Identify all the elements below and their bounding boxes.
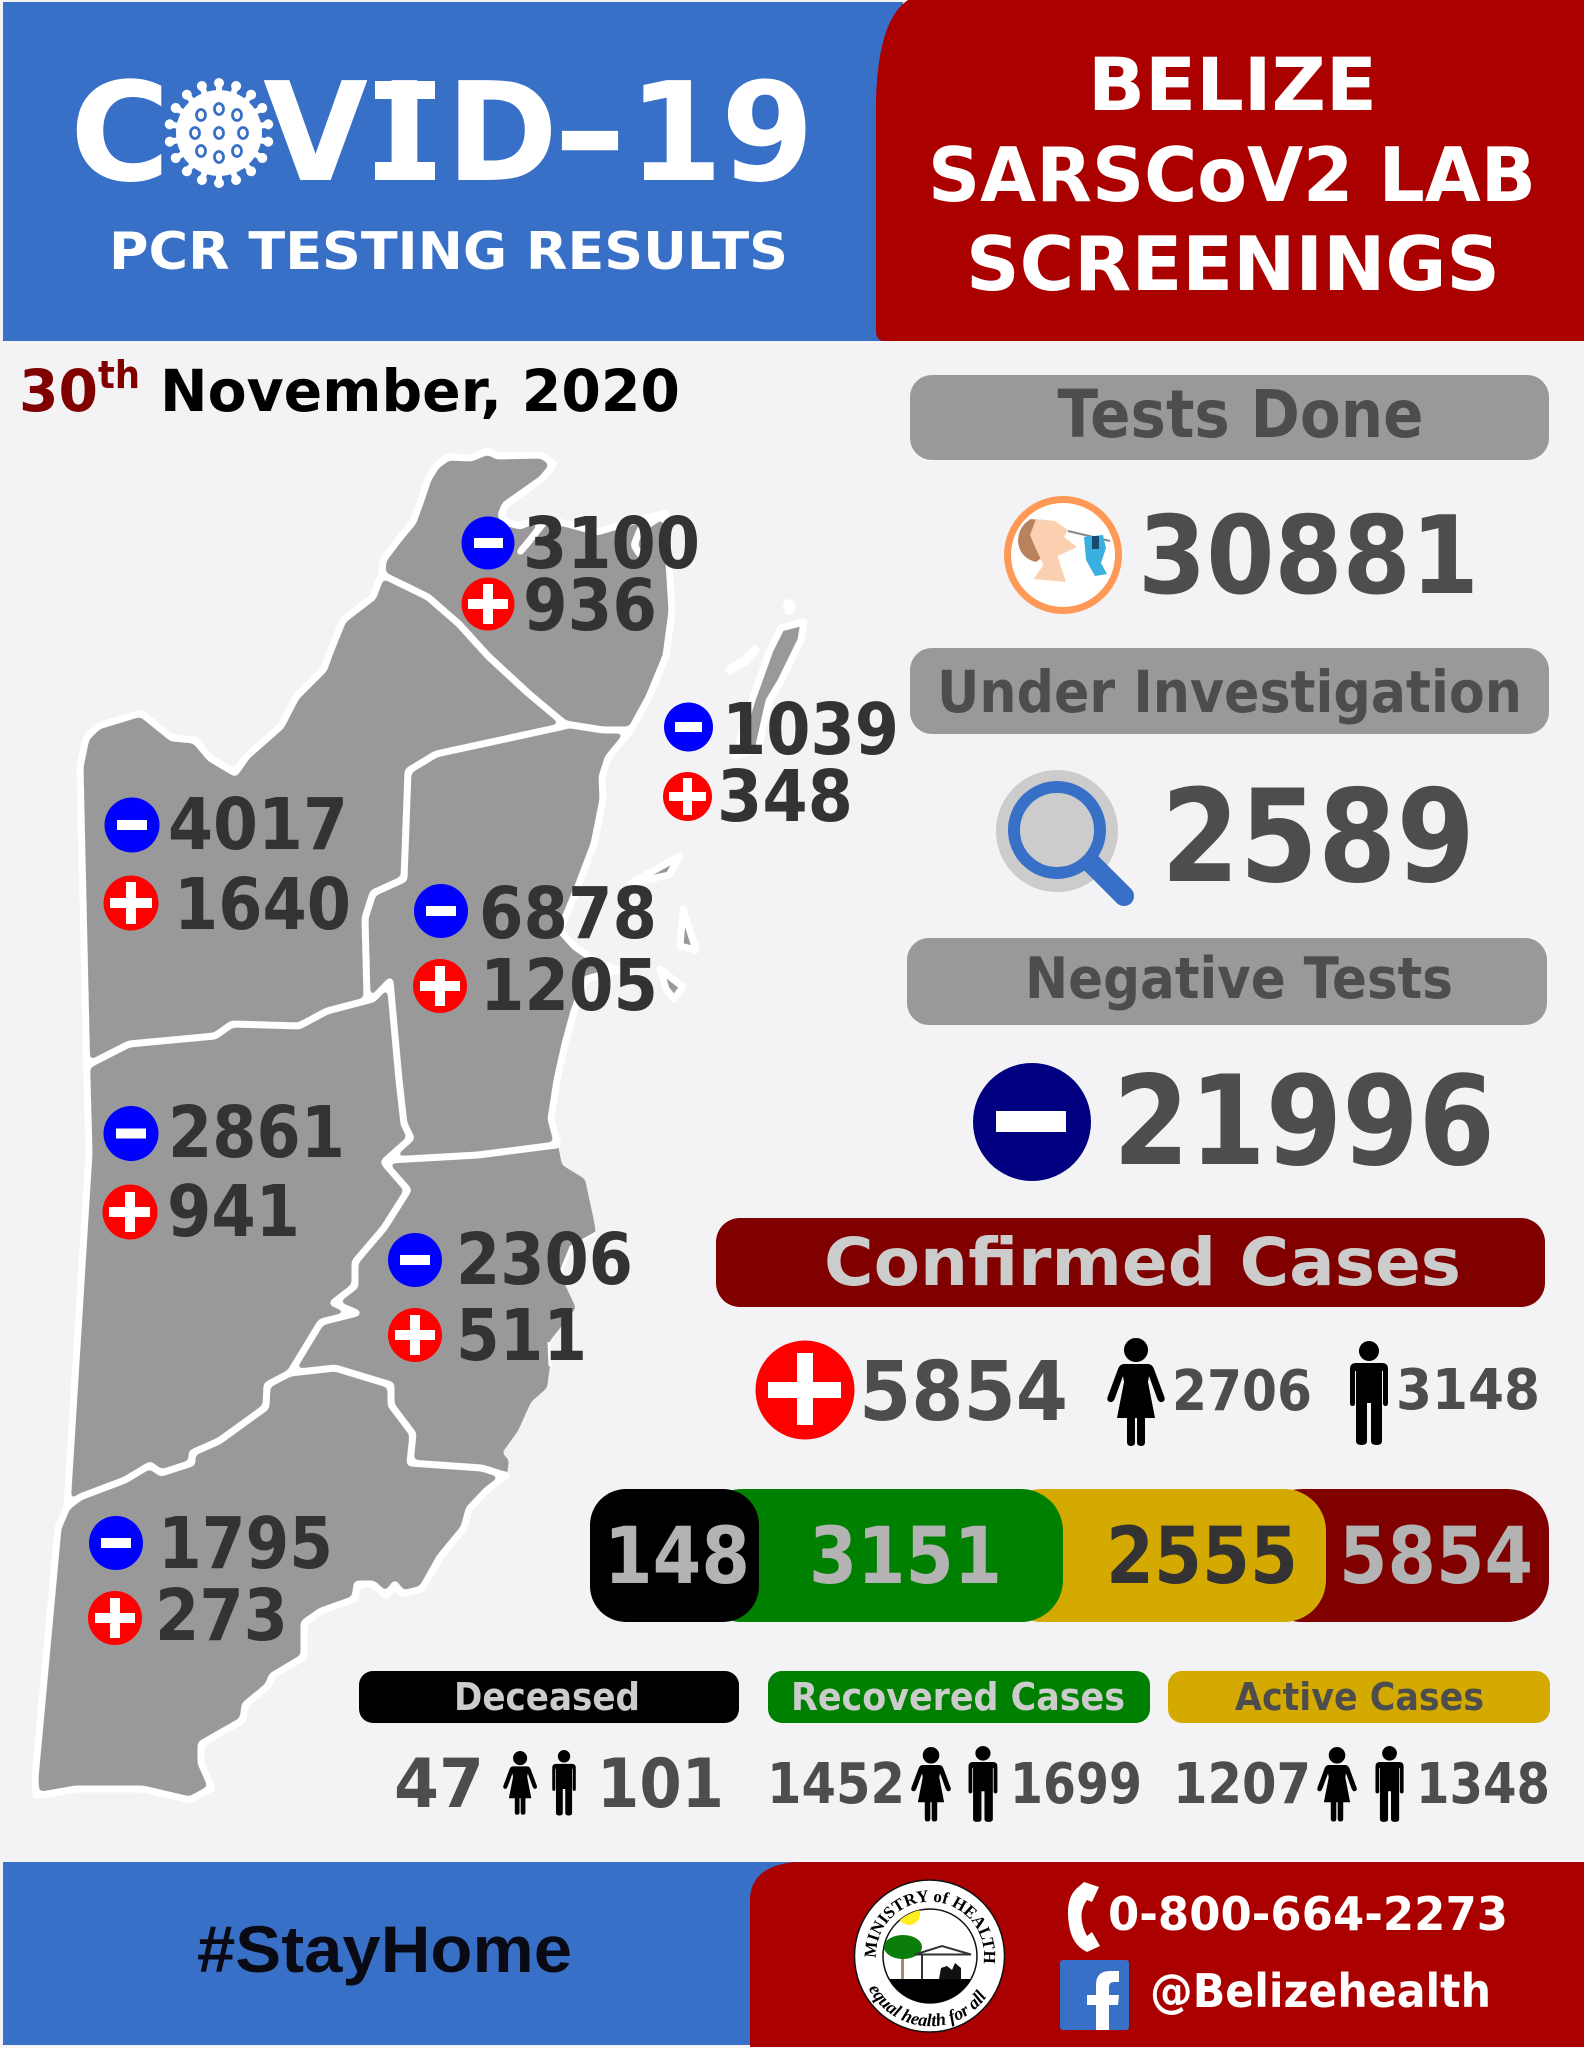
recovered by sex: 1699 <box>1010 1752 1142 1817</box>
panel: tests done <box>910 375 1549 460</box>
district: Orange Walk: 4017 <box>168 783 348 866</box>
title: COVID-19: 9 <box>721 54 814 213</box>
district: Cayo: 941 <box>167 1170 300 1253</box>
title: COVID-19: D <box>446 54 558 213</box>
district: Cayo: 2861 <box>168 1091 345 1174</box>
value: under investigation: 2589 <box>1161 763 1475 912</box>
district: Stann Creek: 2306 <box>456 1218 633 1301</box>
district: Toledo: 1795 <box>158 1502 333 1585</box>
deceased by sex: 47 <box>394 1745 484 1824</box>
heading lines <box>928 43 1536 308</box>
icon: male <box>1350 1341 1388 1445</box>
header: blue title panel <box>3 2 903 341</box>
district: Stann Creek: 511 <box>456 1294 587 1377</box>
active by sex <box>1173 1746 1550 1822</box>
legend: active cases: Active Cases <box>1235 1675 1484 1719</box>
stacked bar: case breakdown: 148 <box>604 1512 750 1602</box>
islands <box>631 622 804 999</box>
district: San Pedro: 348 <box>717 755 853 838</box>
panel: negative tests: Negative Tests <box>1025 946 1453 1012</box>
district: Belize: 1205 <box>480 944 658 1027</box>
logo: Ministry of Health seal <box>854 1879 1006 2033</box>
icon: minus circle <box>973 1063 1091 1181</box>
value: tests done: 30881 <box>1138 494 1479 619</box>
district: Stann Creek <box>388 1218 633 1377</box>
icon: female <box>1107 1338 1165 1446</box>
district: Cayo <box>102 1091 345 1253</box>
icon: magnifying glass <box>996 770 1124 896</box>
legend: deceased <box>359 1671 739 1723</box>
title: COVID-19 <box>70 54 814 213</box>
panel: tests done: Tests Done <box>1058 376 1424 453</box>
icon: telephone <box>1068 1882 1100 1952</box>
icon: Facebook <box>1060 1960 1129 2030</box>
panel: confirmed cases <box>716 1218 1545 1307</box>
deceased by sex: 101 <box>597 1745 724 1824</box>
value: confirmed male: 3148 <box>1396 1358 1540 1423</box>
thin coast marks <box>549 1233 596 1366</box>
district: Belize: 6878 <box>479 872 657 955</box>
district: Corozal: 936 <box>523 564 657 647</box>
value: confirmed female: 2706 <box>1172 1359 1312 1424</box>
title: COVID-19: 1 <box>628 54 723 213</box>
active by sex: 1348 <box>1416 1752 1550 1817</box>
footer: blue hashtag panel: #StayHome <box>197 1912 572 1986</box>
date: November, 2020 <box>160 357 680 425</box>
heading lines: SCREENINGS <box>966 220 1500 308</box>
district borders and coastline <box>35 451 672 1800</box>
footer: blue hashtag panel <box>3 1862 803 2045</box>
value: negative tests: 21996 <box>1113 1050 1495 1194</box>
icon: nasal swab test <box>1008 500 1118 610</box>
title: COVID-19: - <box>552 54 628 213</box>
district: San Pedro <box>663 688 899 838</box>
recovered by sex <box>767 1746 1142 1822</box>
district: San Pedro: 1039 <box>722 688 899 771</box>
stacked bar: case breakdown <box>590 1489 1549 1622</box>
date: 30 <box>19 357 98 425</box>
panel: under investigation: Under Investigation <box>937 658 1522 726</box>
value: confirmed cases: 5854 <box>859 1345 1068 1440</box>
panel: negative tests <box>907 938 1547 1025</box>
title: COVID-19: V <box>263 54 368 213</box>
district: Toledo: 273 <box>155 1574 288 1657</box>
header: red title panel <box>876 0 1584 341</box>
icon: plus circle <box>756 1340 854 1440</box>
icon: virus forming the letter O <box>164 78 274 188</box>
logo: Ministry of Health seal: MINISTRY of HEALTH <box>864 1890 996 1964</box>
date: th <box>98 353 140 397</box>
subtitle: PCR testing results: PCR TESTING RESULTS <box>109 222 788 282</box>
district: Corozal: 3100 <box>523 502 700 585</box>
deceased by sex <box>394 1745 724 1824</box>
stacked bar: case breakdown: 2555 <box>1106 1512 1298 1602</box>
recovered by sex: 1452 <box>767 1752 905 1817</box>
district: Belize <box>413 872 658 1027</box>
land mass <box>35 451 672 1800</box>
map of Belize districts <box>35 451 804 1800</box>
district: Orange Walk <box>104 783 351 946</box>
district: Orange Walk: 1640 <box>174 863 351 946</box>
logo: Ministry of Health seal: equal health for all <box>870 1986 986 2027</box>
legend: recovered cases: Recovered Cases <box>791 1675 1125 1719</box>
stacked bar: case breakdown: 5854 <box>1339 1512 1533 1602</box>
active by sex: 1207 <box>1173 1752 1311 1817</box>
small cayes <box>783 599 795 615</box>
district: Toledo <box>88 1502 333 1657</box>
Facebook handle: @Belizehealth <box>1150 1964 1491 2018</box>
footer: red contact panel <box>750 1862 1584 2047</box>
heading lines: SARSCoV2 LAB <box>928 131 1536 219</box>
stacked bar: case breakdown: 3151 <box>809 1512 1002 1602</box>
legend: deceased: Deceased <box>454 1675 640 1719</box>
district: Corozal <box>462 502 700 647</box>
title: COVID-19: C <box>70 54 170 213</box>
title: COVID-19: I <box>379 54 430 213</box>
panel: confirmed cases: Confirmed Cases <box>824 1224 1461 1301</box>
phone number: 0-800-664-2273 <box>1108 1887 1508 1941</box>
heading lines: BELIZE <box>1088 43 1377 128</box>
legend: active cases <box>1168 1671 1550 1723</box>
